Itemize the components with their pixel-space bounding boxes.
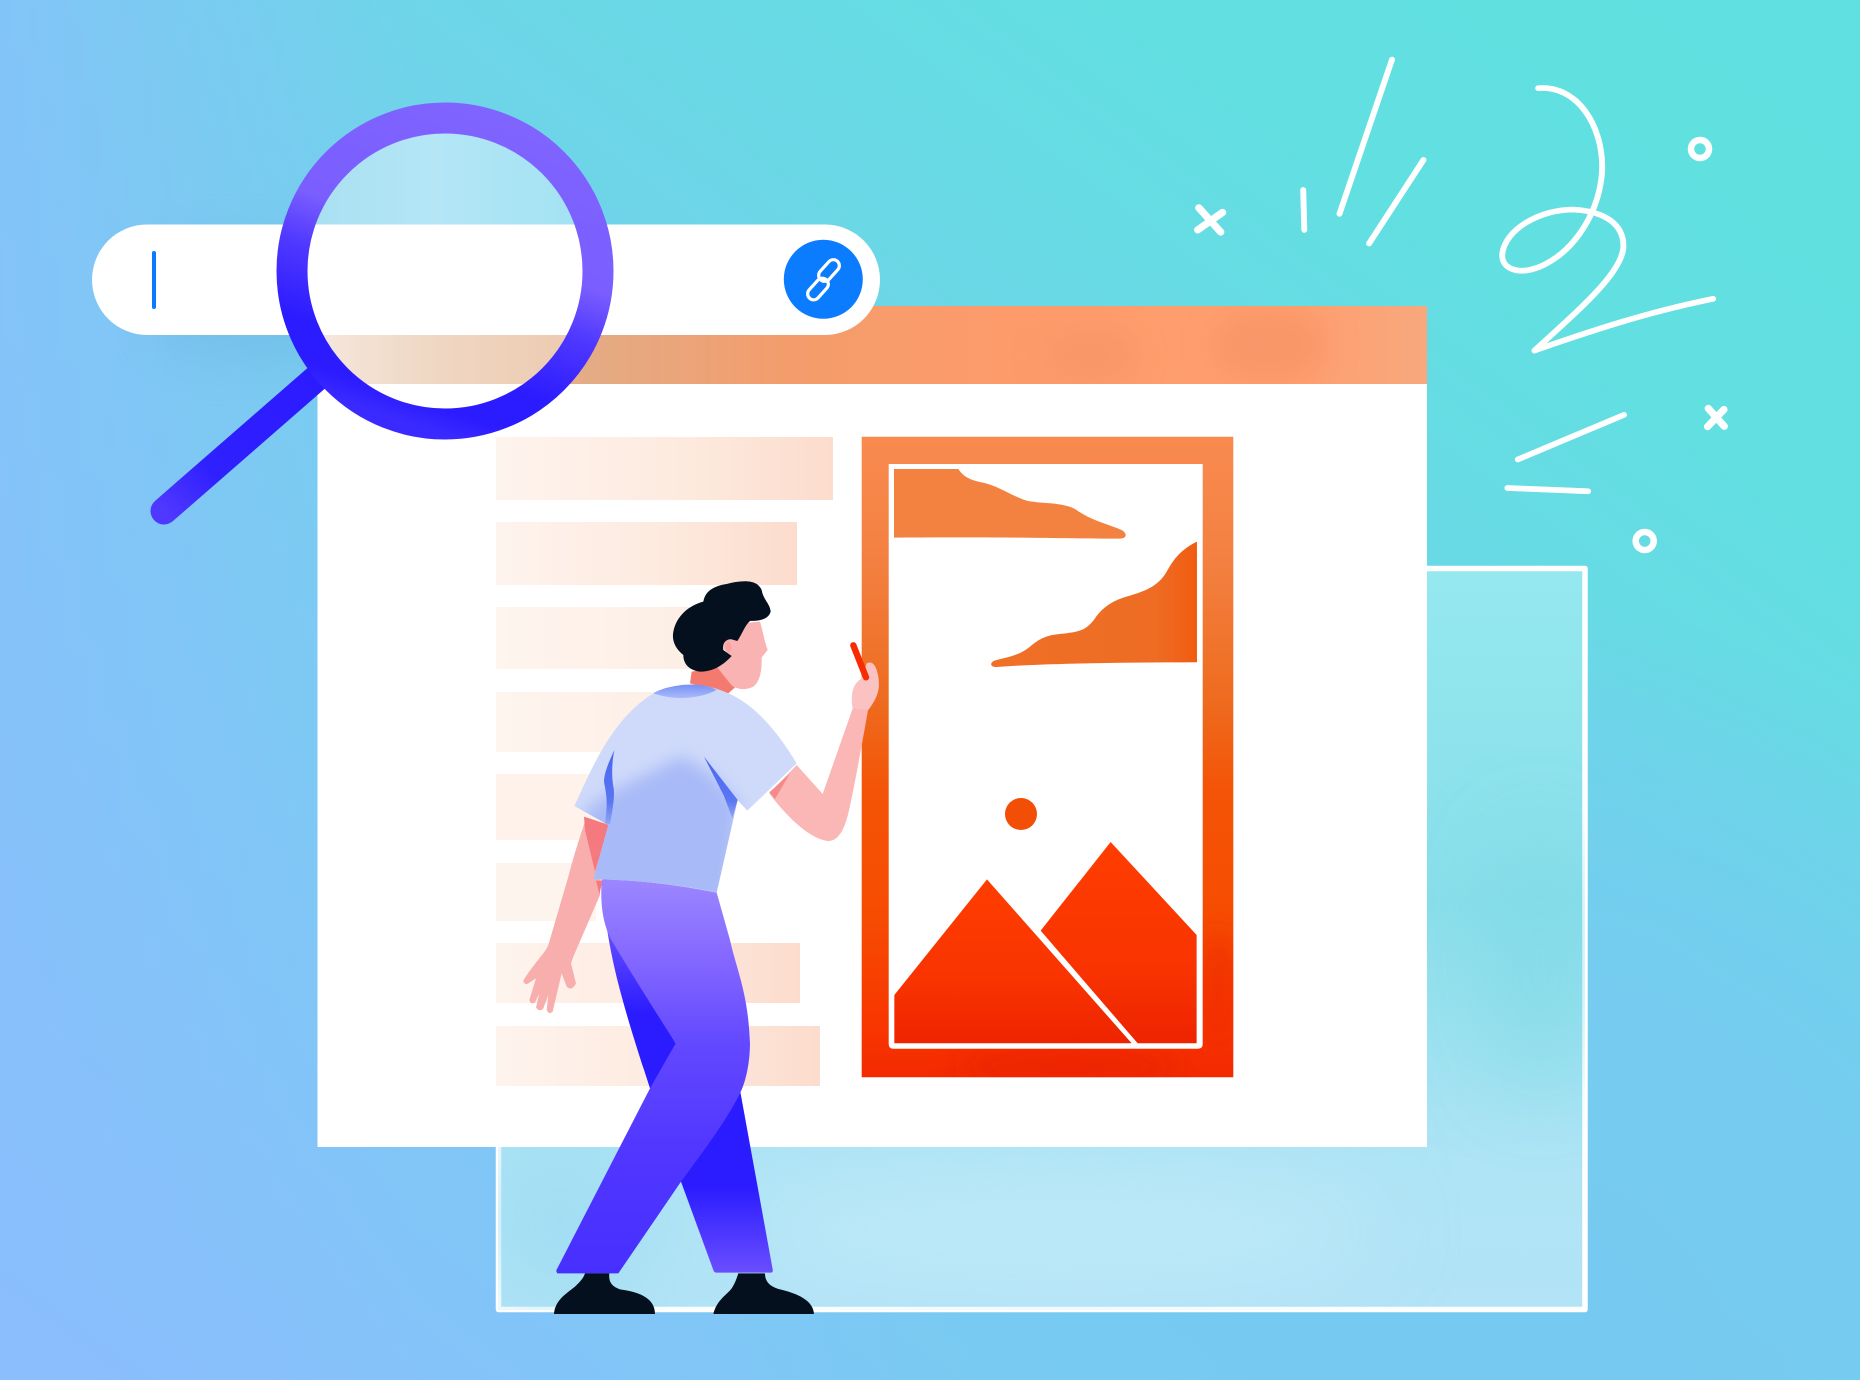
ear bbox=[725, 642, 731, 653]
person bbox=[523, 581, 879, 1314]
right shoe bbox=[713, 1273, 814, 1314]
neck bbox=[690, 667, 735, 693]
search bar bbox=[92, 224, 880, 335]
panel: back outlined watercolor card bbox=[480, 568, 1590, 1310]
shirt bbox=[574, 684, 797, 903]
icon: sun bbox=[1005, 798, 1037, 830]
icon: mountains bbox=[894, 842, 1197, 1043]
small circle bottom bbox=[1636, 532, 1654, 550]
text placeholder bars bbox=[496, 437, 833, 1086]
browser page body bbox=[318, 384, 1427, 1147]
lens tint bbox=[316, 134, 574, 384]
image frame bbox=[862, 437, 1234, 1084]
decorative doodles bbox=[1198, 60, 1724, 491]
face bbox=[717, 622, 768, 689]
lower lines bbox=[1507, 415, 1624, 491]
raised arm bbox=[769, 707, 868, 841]
hair bbox=[673, 581, 771, 672]
hand bbox=[852, 662, 879, 710]
picture border bbox=[862, 437, 1233, 1077]
left shoe bbox=[554, 1273, 655, 1314]
handle bbox=[164, 375, 320, 511]
squiggle bbox=[1502, 88, 1713, 351]
back leg bbox=[607, 927, 773, 1273]
icon: lower cloud bbox=[991, 542, 1197, 667]
panel: browser window bbox=[318, 306, 1427, 1147]
magnifying glass bbox=[164, 100, 600, 511]
search bar shadow bbox=[150, 240, 590, 360]
front leg and hips bbox=[556, 879, 750, 1273]
browser title bar bbox=[318, 306, 1427, 385]
icon: upper cloud bbox=[894, 469, 1126, 539]
lens ring bbox=[292, 118, 598, 424]
crosses bbox=[1198, 208, 1724, 427]
lowered arm and hand bbox=[523, 817, 609, 1013]
text cursor bbox=[152, 251, 156, 309]
search bar pill bbox=[92, 224, 880, 335]
small circle top bbox=[1691, 140, 1709, 158]
icon: link button bbox=[784, 240, 863, 319]
pen bbox=[853, 645, 866, 677]
burst lines bbox=[1303, 60, 1423, 243]
frame watercolor shading bbox=[964, 937, 1234, 1078]
